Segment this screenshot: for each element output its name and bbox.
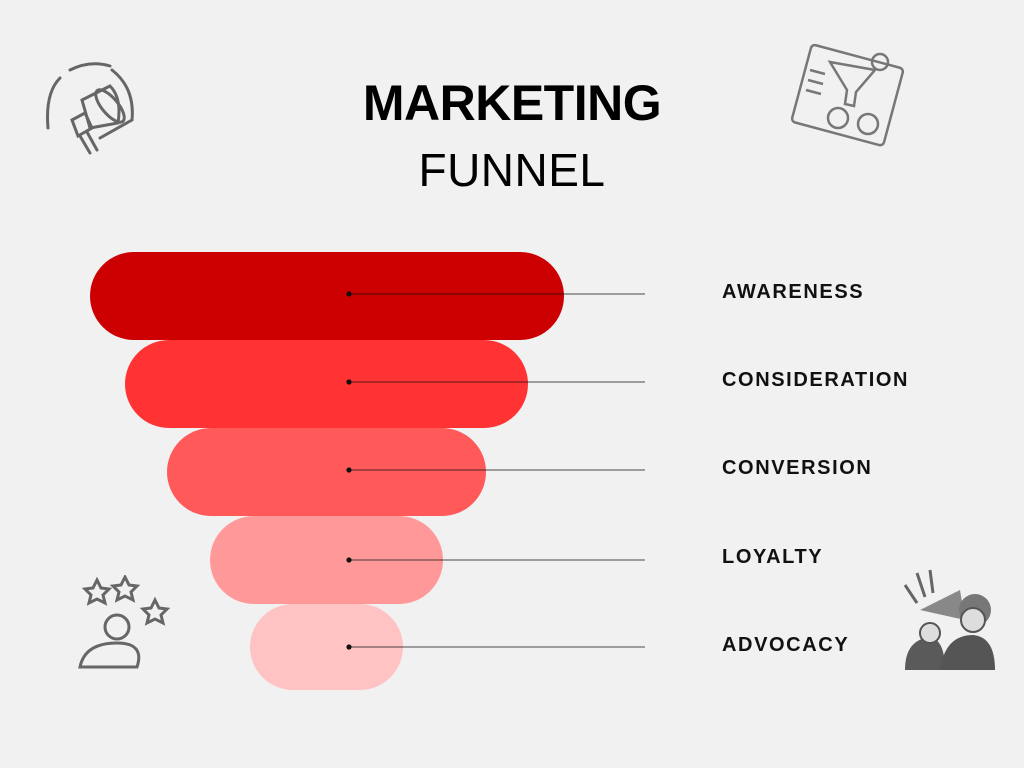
label: loyalty: LOYALTY	[722, 546, 823, 568]
icon: funnel dashboard	[790, 44, 904, 146]
title: MARKETING	[363, 75, 661, 131]
bar: conversion	[167, 428, 486, 516]
bar: consideration	[125, 340, 528, 428]
bar: awareness	[90, 252, 564, 340]
label: advocacy: ADVOCACY	[722, 634, 849, 656]
subtitle: FUNNEL	[418, 144, 606, 196]
funnel	[90, 252, 564, 690]
icon: megaphone	[46, 62, 134, 155]
label: consideration: CONSIDERATION	[722, 369, 909, 391]
label: awareness: AWARENESS	[722, 281, 864, 303]
bar: loyalty	[210, 516, 443, 604]
label: conversion: CONVERSION	[722, 457, 872, 479]
bar: advocacy	[250, 604, 403, 690]
icon: user with stars	[78, 575, 170, 668]
icon: people with megaphone	[904, 570, 995, 670]
